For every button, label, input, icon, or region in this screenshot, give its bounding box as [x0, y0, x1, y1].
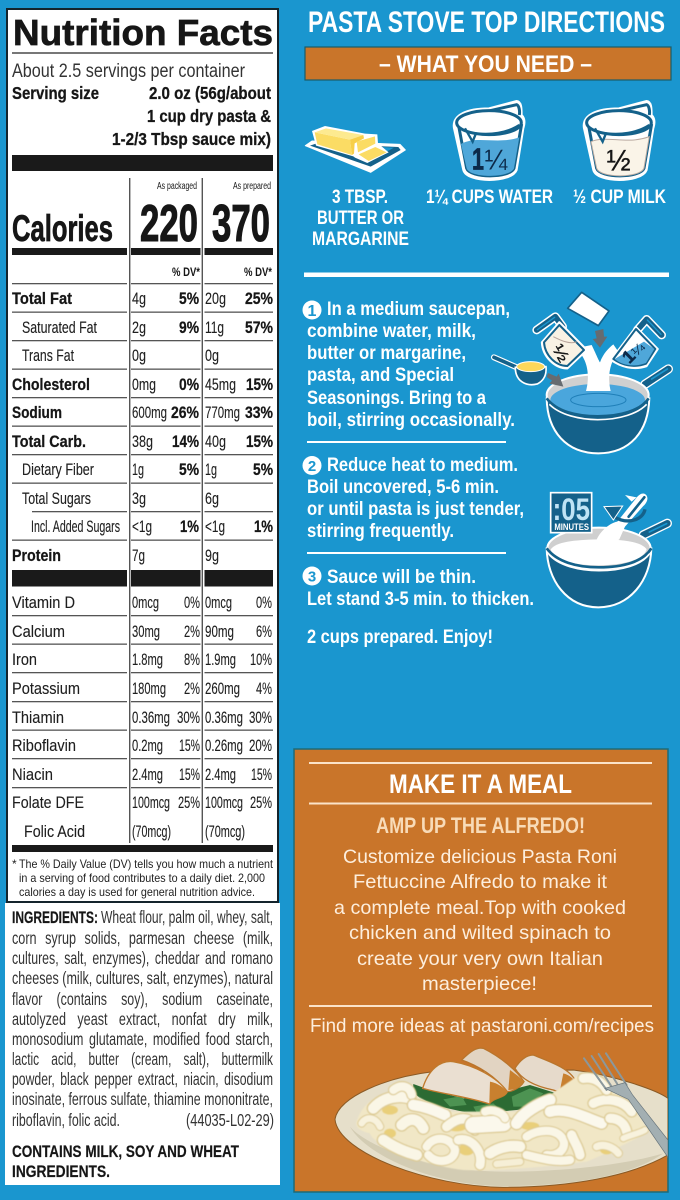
- step number 3: [302, 566, 322, 586]
- serving information: [12, 61, 271, 149]
- calories row: As prepared: [233, 181, 271, 192]
- macronutrient table: 9%: [179, 318, 199, 337]
- icon: measuring cup with water: 1: [472, 142, 484, 176]
- macronutrient table: 4g: [132, 289, 146, 308]
- vitamins and minerals table: 0.2mg: [132, 736, 163, 755]
- step number 2: 2: [308, 458, 316, 475]
- ingredients list: inosinate, ferrous sulfate, thiamine mononitrate,: [12, 1089, 273, 1109]
- footnote: *: [12, 857, 17, 871]
- macronutrient table: 11g: [205, 318, 224, 337]
- vitamins and minerals table: 100mcg: [132, 793, 170, 812]
- step 2 text: Reduce heat to medium.: [327, 454, 518, 476]
- macronutrient table: Trans Fat: [22, 346, 74, 365]
- recipe description: masterpiece!: [422, 973, 537, 995]
- vitamins and minerals table: 0%: [184, 593, 200, 612]
- vitamins and minerals table: Riboflavin: [12, 736, 76, 755]
- footnote: [12, 857, 274, 899]
- vitamins and minerals table: 30%: [177, 708, 200, 727]
- macronutrient table: 7g: [132, 546, 145, 565]
- step number 3: 3: [308, 568, 316, 586]
- footnote: The % Daily Value (DV) tells you how much a nutrient: [19, 857, 274, 871]
- vitamins and minerals table: (70mcg): [132, 822, 171, 841]
- water cup: 1: [618, 346, 639, 367]
- pot handle: [645, 369, 668, 384]
- spinach: [413, 1084, 554, 1112]
- macronutrient table: 33%: [245, 403, 273, 422]
- vitamins and minerals table: Vitamin D: [12, 593, 75, 612]
- milk cup: ½: [548, 341, 573, 365]
- vitamins and minerals table: 100mcg: [205, 793, 243, 812]
- vitamins and minerals table: 15%: [179, 736, 200, 755]
- vitamins and minerals table: 0mcg: [132, 593, 159, 612]
- recipe description: Customize delicious Pasta Roni: [343, 846, 617, 868]
- macronutrient table: 57%: [245, 318, 273, 337]
- macronutrient table: Dietary Fiber: [22, 460, 94, 479]
- macronutrient table: Total Carb.: [12, 432, 86, 451]
- calories row: % DV*: [244, 265, 272, 279]
- yield note: 2 cups prepared. Enjoy!: [307, 626, 493, 648]
- icon: measuring cup with milk: ½: [607, 145, 631, 178]
- ingredients list: lactic acid, butter (cream, salt), buttermilk: [12, 1049, 273, 1069]
- website link text: Find more ideas at pastaroni.com/recipes: [310, 1015, 654, 1037]
- step 2 text: Boil uncovered, 5-6 min.: [307, 476, 499, 498]
- spoon: [596, 494, 647, 543]
- serving information: About 2.5 servings per container: [12, 61, 246, 82]
- macronutrient table: 14%: [172, 432, 199, 451]
- recipe description: chicken and wilted spinach to: [349, 922, 611, 944]
- calories row: 370: [212, 195, 270, 253]
- milk cup: [537, 317, 587, 368]
- macronutrient table: 0g: [205, 346, 219, 365]
- recipe description: a complete meal.Top with cooked: [334, 897, 626, 919]
- allergen statement: INGREDIENTS.: [12, 1163, 110, 1181]
- macronutrient table: 25%: [245, 289, 273, 308]
- macronutrient table: 1g: [132, 460, 144, 479]
- step 2 text: stirring frequently.: [307, 520, 454, 542]
- vitamins and minerals table: 180mg: [132, 679, 166, 698]
- macronutrient table: Cholesterol: [12, 375, 90, 394]
- saucepan: [547, 374, 649, 453]
- step 1 text: combine water, milk,: [307, 320, 476, 342]
- macronutrient table: Sodium: [12, 403, 62, 422]
- macronutrient table: 45mg: [205, 375, 236, 394]
- step 3 text: Sauce will be thin.: [327, 566, 476, 588]
- vitamins and minerals table: 0.36mg: [132, 708, 170, 727]
- heading: nutrition facts: Nutrition Facts: [13, 12, 273, 53]
- timer: :05: [553, 492, 590, 527]
- calories row: 220: [140, 195, 198, 253]
- step number 1: 1: [308, 303, 317, 320]
- vitamins and minerals table: 15%: [179, 765, 200, 784]
- fork: [584, 1053, 668, 1157]
- ingredients list: riboflavin, folic acid.: [12, 1110, 120, 1130]
- vitamins and minerals table: 8%: [184, 650, 200, 669]
- recipe description: Fettuccine Alfredo to make it: [353, 871, 608, 893]
- macronutrient table: 15%: [246, 375, 273, 394]
- vitamins and minerals table: 15%: [251, 765, 272, 784]
- vitamins and minerals table: 0mcg: [205, 593, 232, 612]
- panel: nutrition facts: [7, 9, 278, 902]
- macronutrient table: Protein: [12, 546, 61, 565]
- macronutrient table: 1%: [254, 517, 273, 536]
- ingredient labels: MARGARINE: [312, 228, 409, 250]
- ingredients list: powder, black pepper extract, niacin, disodium: [12, 1069, 273, 1089]
- vitamins and minerals table: 20%: [249, 736, 272, 755]
- allergen statement: CONTAINS MILK, SOY AND WHEAT: [12, 1143, 239, 1161]
- calories row: % DV*: [172, 265, 200, 279]
- footnote: calories a day is used for general nutrition advice.: [19, 885, 255, 899]
- vitamins and minerals table: 90mg: [205, 622, 234, 641]
- vitamins and minerals table: 25%: [250, 793, 272, 812]
- serving information: 2.0 oz (56g/about: [149, 83, 271, 103]
- ingredients list: cultures, salt, enzymes), cheddar and romano: [12, 948, 273, 968]
- ingredients list: Wheat flour, palm oil, whey, salt,: [101, 907, 273, 927]
- icon: measuring cup with water: ¼: [485, 144, 508, 176]
- macronutrient table: 770mg: [205, 403, 240, 422]
- vitamins and minerals table: Potassium: [12, 679, 80, 698]
- ingredients list: (44035-L02-29): [186, 1110, 274, 1130]
- step 3 text: Let stand 3-5 min. to thicken.: [307, 588, 534, 610]
- illustration: measuring scoop with butter: [494, 357, 546, 385]
- ingredients list: monosodium glutamate, modified food starch,: [12, 1029, 273, 1049]
- recipe description: [334, 846, 626, 995]
- icon: measuring cup with milk: [584, 101, 654, 180]
- vitamins and minerals table: Folate DFE: [12, 793, 84, 812]
- vitamins and minerals table: Thiamin: [12, 708, 64, 727]
- vitamins and minerals table: 6%: [256, 622, 272, 641]
- vitamins and minerals table: 10%: [250, 650, 272, 669]
- calories row: As packaged: [157, 181, 197, 192]
- ingredient labels: 1¼ CUPS WATER: [426, 186, 553, 208]
- macronutrient table: 0mg: [132, 375, 156, 394]
- vitamins and minerals table: 0.26mg: [205, 736, 243, 755]
- macronutrient table: 26%: [171, 403, 199, 422]
- ingredients list: [12, 907, 274, 1130]
- macronutrient table: 1g: [205, 460, 217, 479]
- banner: what you need: [305, 47, 671, 80]
- vitamins and minerals table: 2%: [184, 622, 200, 641]
- vitamins and minerals table: Niacin: [12, 765, 53, 784]
- vitamins and minerals table: 2.4mg: [132, 765, 163, 784]
- icon: measuring cup with water: [454, 101, 524, 180]
- vitamins and minerals table: Iron: [12, 650, 37, 669]
- ingredient labels: 3 TBSP.: [332, 186, 388, 208]
- step 1 text: pasta, and Special: [307, 364, 454, 386]
- calories row: Calories: [12, 208, 113, 249]
- step 3 text: [302, 566, 534, 610]
- banner: what you need: – WHAT YOU NEED –: [379, 51, 592, 78]
- macronutrient table: 20g: [205, 289, 226, 308]
- illustration: stirring saucepan with timer: [547, 492, 667, 607]
- serving information: Serving size: [12, 83, 99, 103]
- macronutrient table: <1g: [205, 517, 225, 536]
- heading: make it a meal: MAKE IT A MEAL: [389, 769, 572, 799]
- macronutrient table: [12, 289, 273, 565]
- vitamins and minerals table: 260mg: [205, 679, 240, 698]
- step 2 text: [302, 454, 524, 542]
- step 1 text: [302, 298, 515, 431]
- illustration: ingredients poured into saucepan: [537, 292, 668, 453]
- macronutrient table: Total Fat: [12, 289, 72, 308]
- plate: [335, 1070, 668, 1187]
- vitamins and minerals table: 1.9mg: [205, 650, 236, 669]
- step 1 text: In a medium saucepan,: [327, 298, 510, 320]
- row rules: [12, 283, 273, 788]
- vitamins and minerals table: 2.4mg: [205, 765, 236, 784]
- vitamins and minerals table: 1.8mg: [132, 650, 163, 669]
- macronutrient table: 15%: [246, 432, 273, 451]
- ingredients list: INGREDIENTS:: [12, 909, 98, 927]
- subheading: AMP UP THE ALFREDO!: [376, 813, 585, 838]
- vitamins and minerals table: Calcium: [12, 622, 65, 641]
- macronutrient table: <1g: [132, 517, 152, 536]
- serving information: 1-2/3 Tbsp sauce mix): [112, 129, 271, 149]
- macronutrient table: 6g: [205, 489, 219, 508]
- macronutrient table: 0%: [179, 375, 199, 394]
- panel: ingredients: [5, 903, 280, 1185]
- footnote: in a serving of food contributes to a daily diet. 2,000: [19, 871, 265, 885]
- saucepan: [547, 528, 651, 607]
- step 1 text: Seasonings. Bring to a: [307, 387, 487, 409]
- vitamins and minerals table: (70mcg): [205, 822, 245, 841]
- vitamins and minerals table: 4%: [256, 679, 272, 698]
- macronutrient table: 5%: [253, 460, 273, 479]
- allergen statement: [12, 1143, 239, 1181]
- macronutrient table: 9g: [205, 546, 219, 565]
- panel: make it a meal: [294, 749, 668, 1192]
- vitamins and minerals table: 30mg: [132, 622, 160, 641]
- macronutrient table: 3g: [132, 489, 146, 508]
- pot handle: [643, 523, 667, 535]
- step number 2: [302, 456, 322, 475]
- ingredient labels: [312, 186, 666, 250]
- fettuccine: [356, 1077, 647, 1170]
- arrow: packet down: [593, 329, 607, 348]
- ingredients list: cheeses (milk, cultures, salt, enzymes), natural: [12, 968, 273, 988]
- step 2 text: or until pasta is just tender,: [307, 498, 524, 520]
- icon: butter on a dish: [305, 126, 405, 172]
- macronutrient table: Incl. Added Sugars: [31, 517, 120, 536]
- macronutrient table: 5%: [179, 460, 199, 479]
- macronutrient table: 5%: [179, 289, 199, 308]
- timer: MINUTES: [554, 522, 589, 532]
- ingredients list: autolyzed yeast extract, nonfat dry milk,: [12, 1009, 273, 1029]
- vitamins and minerals table: 0.36mg: [205, 708, 243, 727]
- photo: fettuccine alfredo plate: [335, 1048, 668, 1187]
- step 1 text: butter or margarine,: [307, 342, 466, 364]
- calories row: [12, 181, 273, 279]
- milk and water streams: [575, 344, 618, 391]
- macronutrient table: 600mg: [132, 403, 167, 422]
- recipe description: create your very own Italian: [357, 948, 603, 970]
- vitamins and minerals table: [12, 593, 272, 841]
- arrow: stirring direction: [604, 495, 645, 521]
- vitamins and minerals table: 25%: [178, 793, 200, 812]
- step 1 text: boil, stirring occasionally.: [307, 409, 515, 431]
- macronutrient table: 40g: [205, 432, 226, 451]
- ingredient labels: BUTTER OR: [317, 207, 404, 229]
- macronutrient table: 0g: [132, 346, 146, 365]
- ingredients list: corn syrup solids, parmesan cheese (milk,: [12, 928, 273, 948]
- vitamins and minerals table: 30%: [249, 708, 272, 727]
- ingredients list: flavor (contains soy), sodium caseinate,: [12, 989, 273, 1009]
- macronutrient table: Saturated Fat: [22, 318, 97, 337]
- arrow: butter to pot: [547, 373, 563, 387]
- macronutrient table: 2g: [132, 318, 146, 337]
- macronutrient table: 38g: [132, 432, 153, 451]
- water cup: [611, 319, 662, 368]
- vitamins and minerals table: 0%: [256, 593, 272, 612]
- vitamins and minerals table: 2%: [184, 679, 200, 698]
- vitamins and minerals table: Folic Acid: [24, 822, 85, 841]
- seasoning packet: [568, 292, 609, 326]
- step number 1: [302, 300, 322, 320]
- chicken slices: [423, 1048, 576, 1104]
- water cup: ¼: [628, 339, 648, 359]
- macronutrient table: 1%: [180, 517, 199, 536]
- macronutrient table: Total Sugars: [22, 489, 91, 508]
- serving information: 1 cup dry pasta &: [147, 106, 271, 126]
